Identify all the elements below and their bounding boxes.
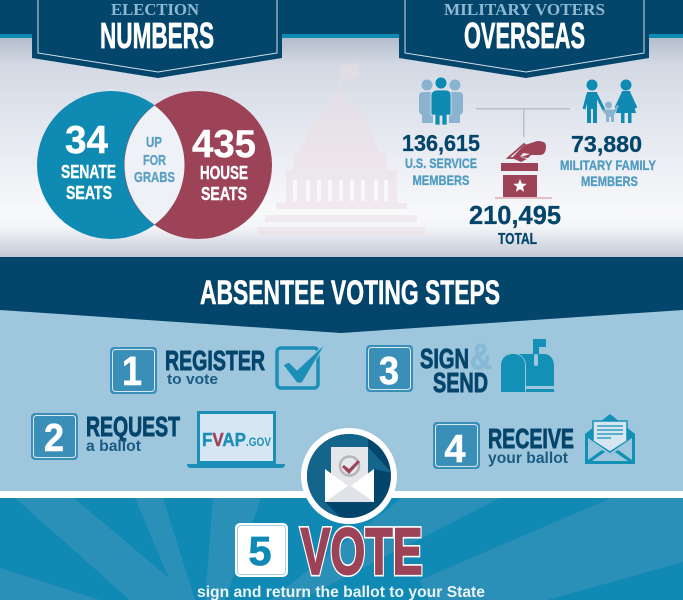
- sign and send text: SIGN: [420, 343, 469, 374]
- banner: military voters overseas: [399, 0, 649, 78]
- banner: election numbers: [32, 0, 282, 78]
- vote heading: VOTE: [300, 514, 422, 588]
- step 4: receive: [433, 414, 635, 471]
- icon: checkbox: [277, 343, 326, 388]
- icon: envelope badge: [300, 428, 397, 524]
- senate circle: [37, 91, 185, 239]
- overlap label: FOR: [143, 153, 166, 169]
- vote section background with rays: [0, 498, 683, 600]
- house label: SEATS: [201, 184, 247, 204]
- number box 2: [31, 413, 78, 460]
- icon: open envelope with letter: [585, 414, 635, 464]
- request text: a ballot: [86, 438, 142, 455]
- register text: REGISTER: [165, 345, 265, 376]
- number box 4: [433, 422, 480, 471]
- house label: 435: [192, 123, 256, 166]
- stat: service members: MEMBERS: [412, 172, 470, 188]
- number box 1: 1: [122, 348, 142, 394]
- stat: military family: MEMBERS: [581, 173, 638, 189]
- request text: [86, 411, 180, 455]
- step 2: request: [31, 411, 285, 468]
- number box 3: 3: [379, 350, 399, 393]
- number box 3: [366, 345, 413, 393]
- icon: laptop with fvap.gov: [187, 412, 285, 468]
- stat: service members: U.S. SERVICE: [405, 155, 477, 171]
- white divider band: [0, 491, 683, 498]
- sign and send text: &: [470, 336, 492, 377]
- receive text: RECEIVE: [488, 423, 574, 454]
- senate label: SENATE: [61, 162, 116, 182]
- steps section background: [0, 300, 683, 492]
- icon: laptop with fvap.gov: .GOV: [246, 435, 271, 449]
- senate label: [61, 119, 116, 203]
- icon: laptop with fvap.gov: FVAP: [202, 430, 246, 450]
- vote heading: [300, 514, 422, 588]
- top section background: [0, 0, 683, 260]
- icon: service members: [419, 77, 463, 125]
- sign and send text: SEND: [433, 367, 488, 398]
- sign and send text: [420, 336, 492, 398]
- overlap lens: [124, 106, 185, 224]
- number box 2: 2: [44, 417, 64, 460]
- stat: total: TOTAL: [498, 231, 537, 248]
- stat: service members: 136,615: [402, 130, 480, 156]
- house circle: [124, 91, 272, 239]
- banner: election numbers: ELECTION: [111, 0, 200, 19]
- overlap label: [134, 135, 175, 186]
- register text: [165, 345, 265, 388]
- connector lines: [476, 108, 570, 137]
- icon: mailbox: [501, 339, 554, 392]
- register text: to vote: [167, 371, 218, 388]
- columns of capitol: [293, 180, 388, 201]
- senate label: 34: [65, 119, 108, 162]
- icon: family: [584, 80, 636, 123]
- receive text: your ballot: [488, 450, 569, 467]
- stat: military family: 73,880: [571, 131, 642, 157]
- house label: HOUSE: [200, 163, 248, 183]
- receive text: [488, 423, 574, 467]
- banner: military voters overseas: MILITARY VOTERS: [444, 0, 605, 19]
- overlap label: GRABS: [134, 170, 175, 186]
- step 3: sign and send: [366, 336, 554, 398]
- steps header: [0, 260, 683, 333]
- stat: military family: [560, 131, 657, 189]
- number box 4: 4: [444, 428, 466, 471]
- house label: [192, 123, 256, 204]
- number box 1: [110, 347, 157, 394]
- overlap label: UP: [146, 135, 162, 151]
- steps header: ABSENTEE VOTING STEPS: [200, 274, 500, 312]
- step 1: register: [110, 343, 326, 394]
- banner: election numbers: NUMBERS: [100, 15, 214, 56]
- stat: military family: MILITARY FAMILY: [560, 157, 657, 173]
- banner: military voters overseas: OVERSEAS: [464, 15, 585, 56]
- icon: ballot box: [495, 141, 552, 199]
- request text: REQUEST: [86, 411, 180, 442]
- stat: service members: [402, 130, 480, 188]
- stat: total: 210,495: [469, 200, 561, 230]
- vote heading: VOTE: [300, 514, 422, 588]
- step 5: number box: [235, 523, 288, 577]
- icon: capitol building watermark: [258, 63, 425, 235]
- stat: total: [469, 200, 561, 248]
- senate label: SEATS: [66, 183, 112, 203]
- venn diagram: [37, 91, 272, 239]
- step 5: number box: 5: [248, 528, 272, 574]
